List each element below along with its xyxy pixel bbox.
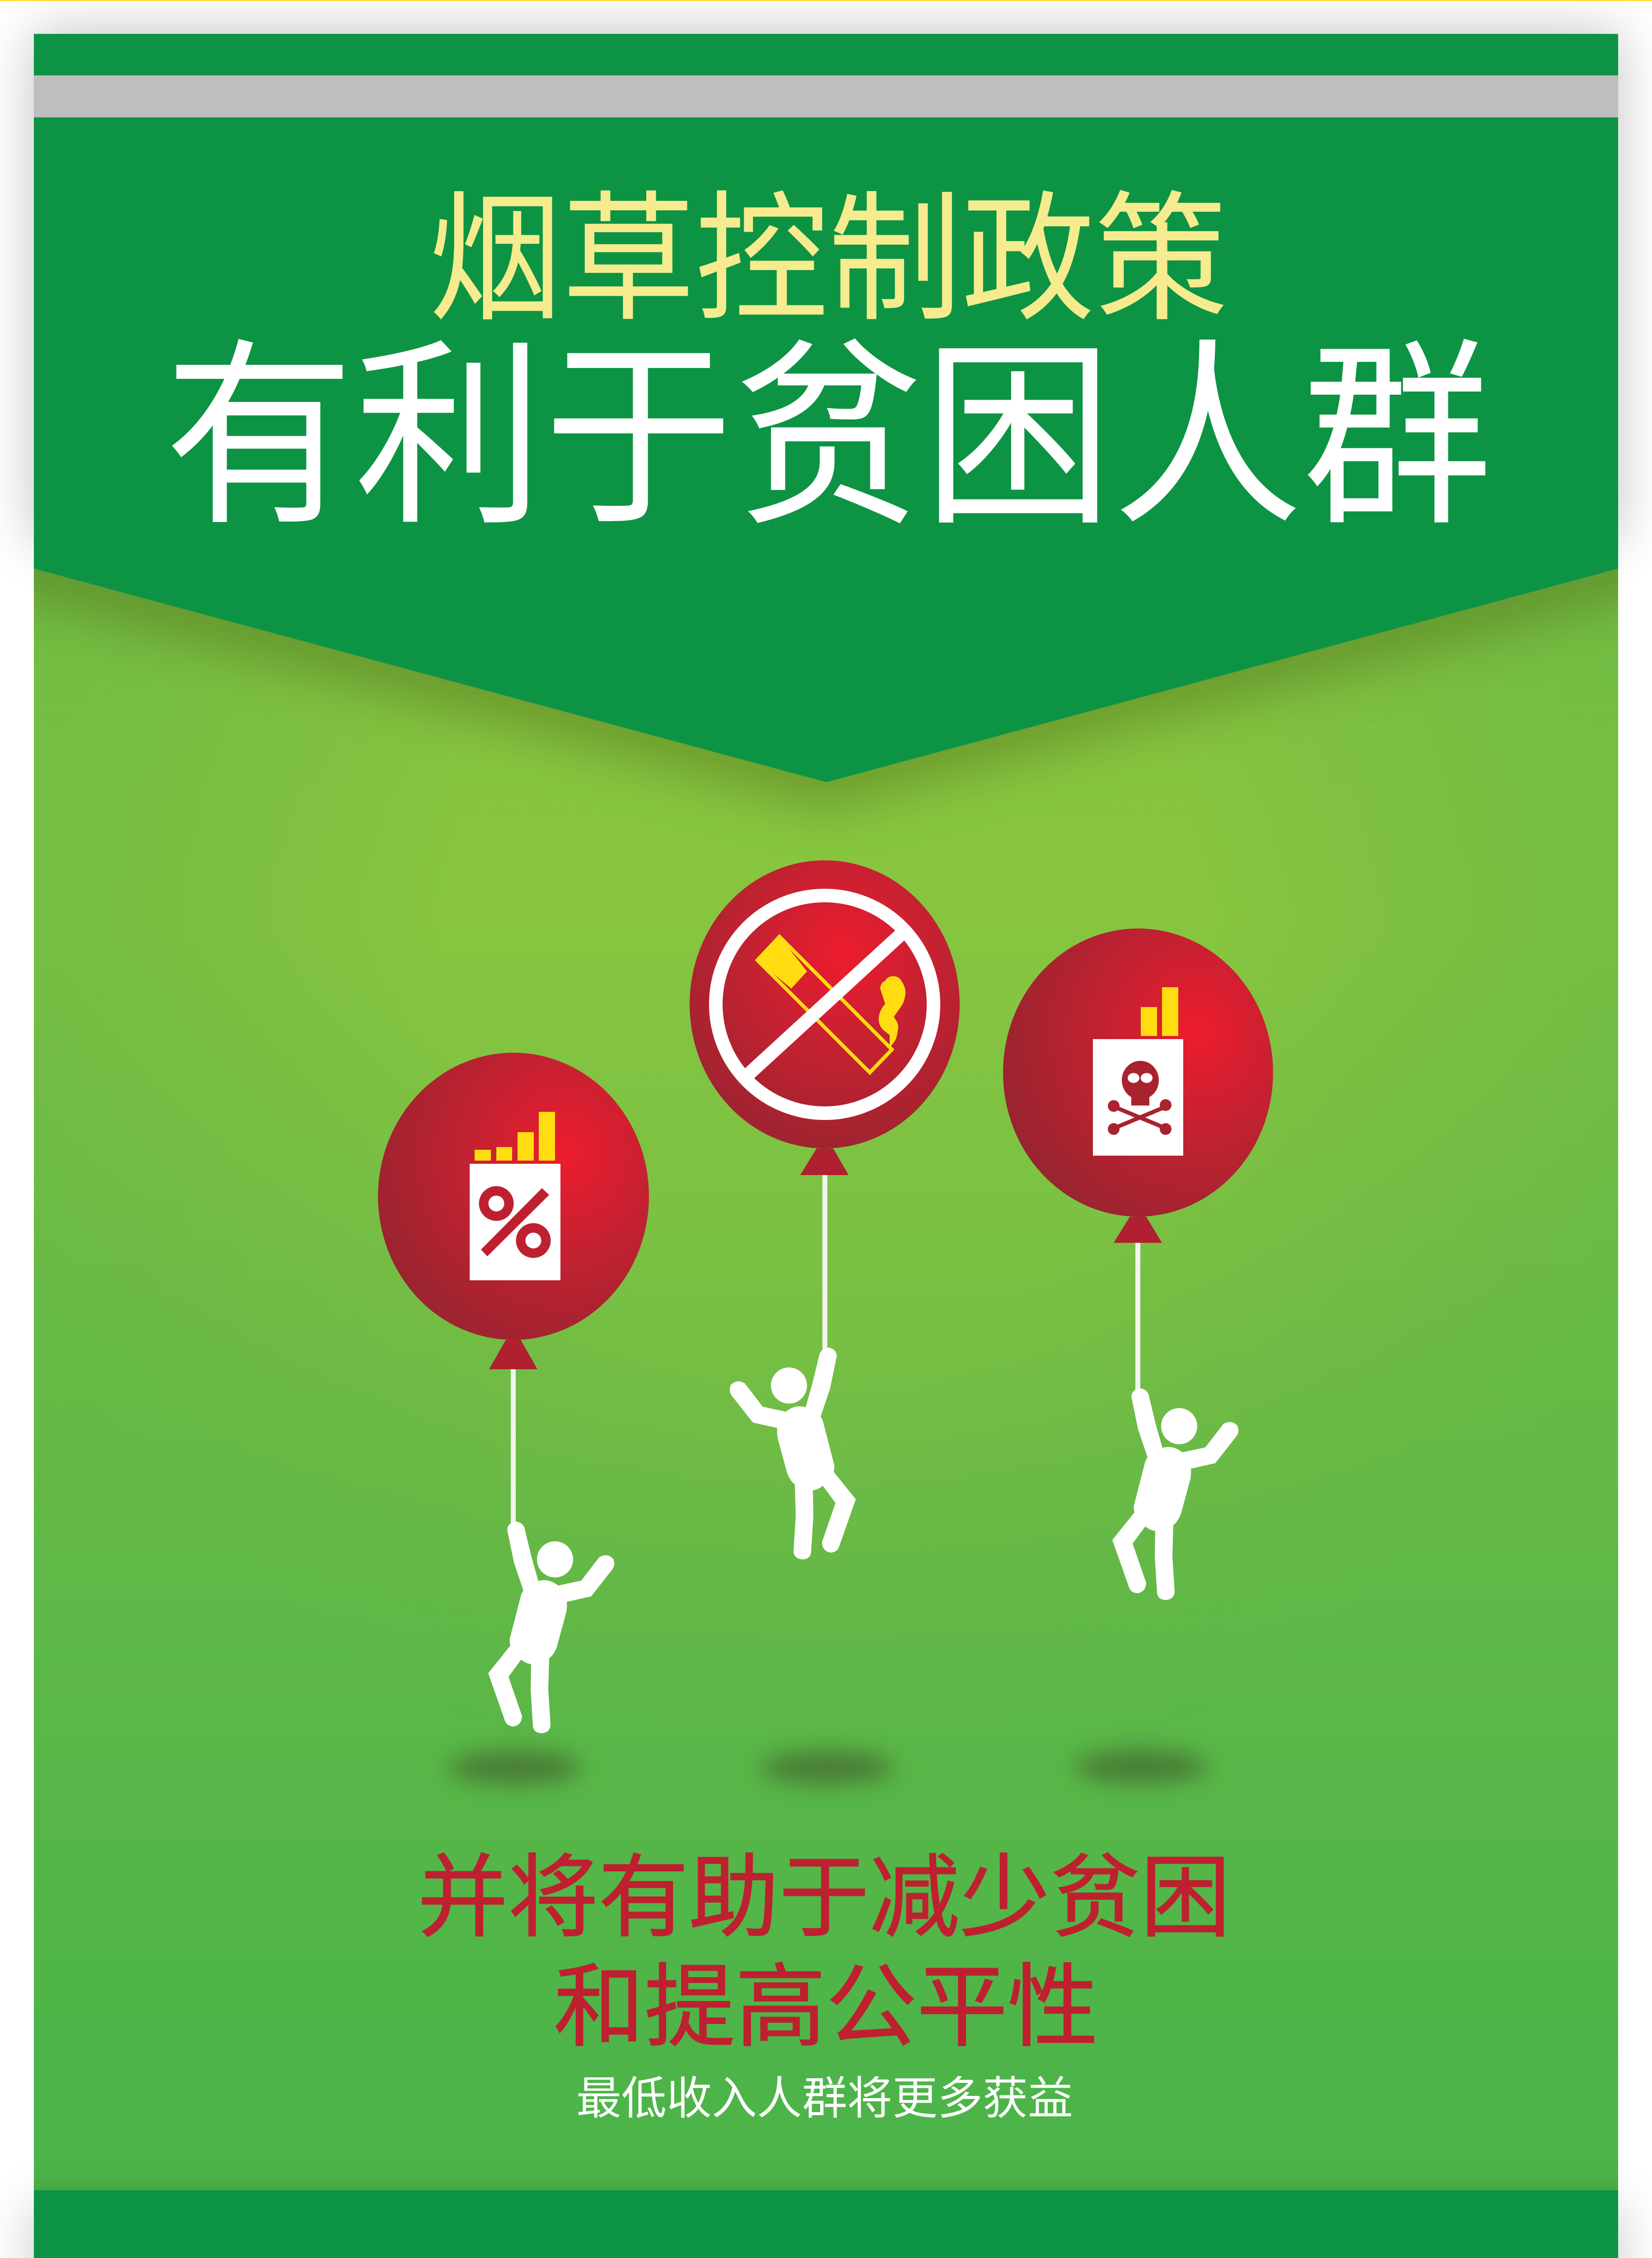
knot centre [800,1148,849,1175]
figure left [488,1521,614,1733]
icon: cigarette pack with skull [1093,987,1183,1156]
balloon right [1003,928,1273,1217]
header band with chevron [34,34,1618,782]
icon: cigarette crossed out [716,896,933,1113]
title line 1: 烟草控制政策 [429,182,1228,338]
top yellow rule [0,0,1652,1]
balloon left [378,1053,649,1340]
knot left [489,1340,537,1369]
balloon group centre: no smoking [690,860,960,1785]
white sub message: 最低收入人群将更多获益 [576,2073,1073,2124]
red message line 2: 和提高公平性 [554,1956,1098,2058]
figure right [1112,1388,1238,1600]
ground shadow right [1074,1749,1208,1784]
icon: cigarette pack with percent [470,1112,560,1280]
knot right [1114,1217,1162,1243]
grey stripe [34,75,1618,117]
balloon group left: price increase [378,1053,649,1785]
red message line 1: 并将有助于减少贫困 [418,1847,1231,1948]
title line 2: 有利于贫困人群 [164,327,1492,549]
ground shadow left [448,1750,582,1785]
ground shadow centre [761,1750,894,1785]
panel: poster background [34,569,1618,2190]
string right [1135,1240,1140,1391]
balloon centre [690,860,960,1148]
figure centre [730,1348,856,1559]
string left [511,1366,516,1524]
footer band [34,2190,1618,2258]
balloon group right: graphic warning [1003,928,1273,1784]
string centre [822,1172,827,1350]
